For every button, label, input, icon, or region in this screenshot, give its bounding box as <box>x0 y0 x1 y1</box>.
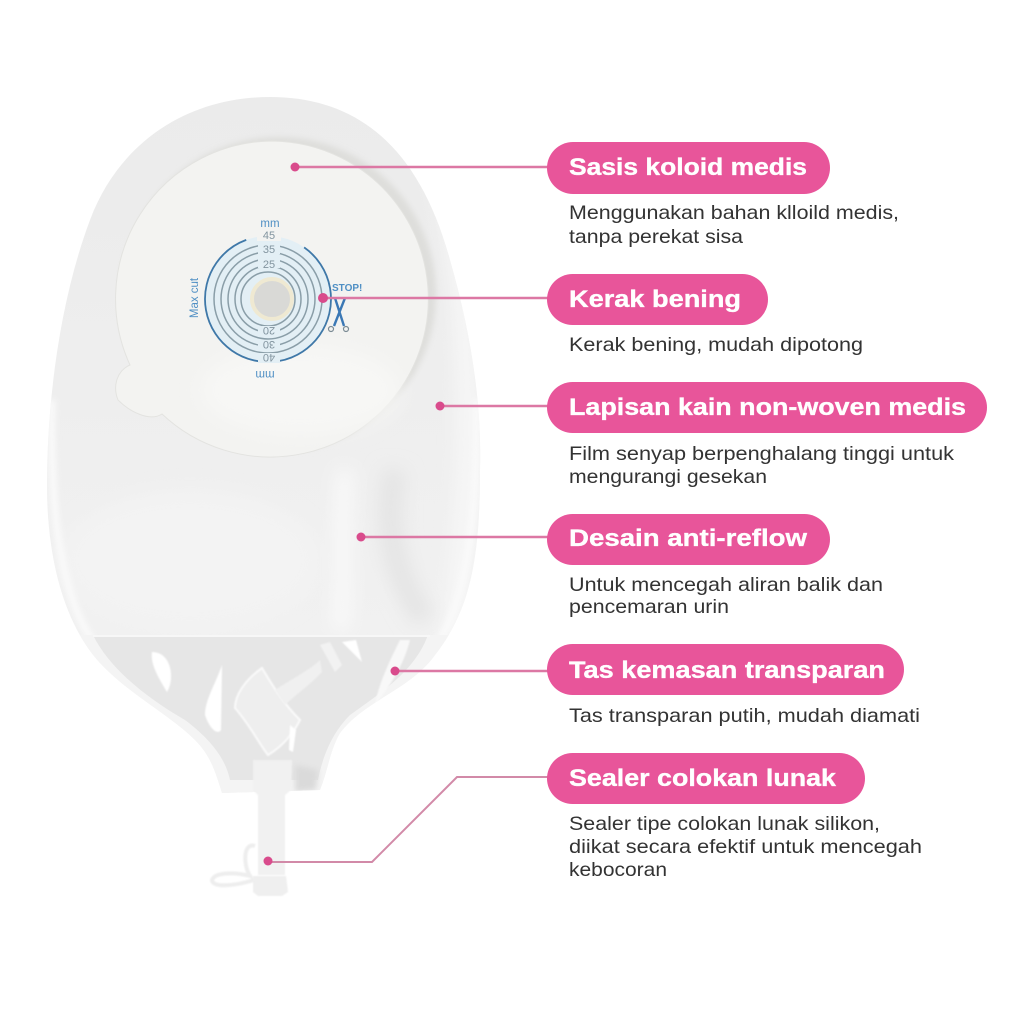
callout 3: Lapisan kain non-woven medis: Lapisan kain non-woven medis <box>569 394 966 421</box>
wafer disc <box>116 137 436 457</box>
transparent lower window <box>30 635 500 800</box>
callout 6: Sealer colokan lunak <box>264 753 922 881</box>
callout 1: Sasis koloid medis: Menggunakan bahan klloild medis, <box>569 202 899 224</box>
measuring guide rings <box>180 211 362 387</box>
callout 6: Sealer colokan lunak: diikat secara efektif untuk mencegah <box>569 836 922 858</box>
callout 2: Kerak bening: Kerak bening, mudah dipotong <box>569 334 863 356</box>
drain tube <box>212 760 292 896</box>
callout 6: Sealer colokan lunak: Sealer tipe colokan lunak silikon, <box>569 813 880 835</box>
measuring guide rings: Max cut <box>189 277 201 318</box>
callout 1: Sasis koloid medis <box>290 142 899 248</box>
measuring guide rings: 25 <box>263 259 275 271</box>
measuring guide rings: 35 <box>263 244 275 256</box>
plastic creases <box>152 652 171 692</box>
callout 5: Tas kemasan transparan: Tas kemasan transparan <box>569 657 885 684</box>
measuring guide rings: mm <box>260 218 280 230</box>
callout 1: Sasis koloid medis: tanpa perekat sisa <box>569 226 743 248</box>
icon: scissors <box>328 298 348 332</box>
measuring guide rings: 45 <box>263 230 275 242</box>
measuring guide rings: STOP! <box>332 283 362 294</box>
measuring guide rings: 30 <box>263 338 275 350</box>
callout 3: Lapisan kain non-woven medis <box>436 382 987 488</box>
measuring guide rings: 40 <box>263 351 275 363</box>
callout 4: Desain anti-reflow <box>356 514 883 618</box>
measuring guide rings: mm <box>255 368 275 380</box>
callout 1: Sasis koloid medis: Sasis koloid medis <box>569 154 807 181</box>
callout 6: Sealer colokan lunak: Sealer colokan lunak <box>569 765 837 792</box>
measuring guide rings: 20 <box>263 324 275 336</box>
callout 4: Desain anti-reflow: pencemaran urin <box>569 596 729 618</box>
callout 4: Desain anti-reflow: Untuk mencegah aliran balik dan <box>569 574 883 596</box>
callout 6: Sealer colokan lunak: kebocoran <box>569 859 667 881</box>
callout 2: Kerak bening: Kerak bening <box>569 286 741 313</box>
callout 2: Kerak bening <box>318 274 863 356</box>
product: ostomy pouch <box>30 90 500 896</box>
callout 5: Tas kemasan transparan <box>390 644 920 727</box>
callout 3: Lapisan kain non-woven medis: Film senyap berpenghalang tinggi untuk <box>569 443 954 465</box>
callout 5: Tas kemasan transparan: Tas transparan putih, mudah diamati <box>569 705 920 727</box>
callout 3: Lapisan kain non-woven medis: mengurangi gesekan <box>569 466 767 488</box>
pouch body <box>30 90 500 800</box>
callout 4: Desain anti-reflow: Desain anti-reflow <box>569 525 807 552</box>
